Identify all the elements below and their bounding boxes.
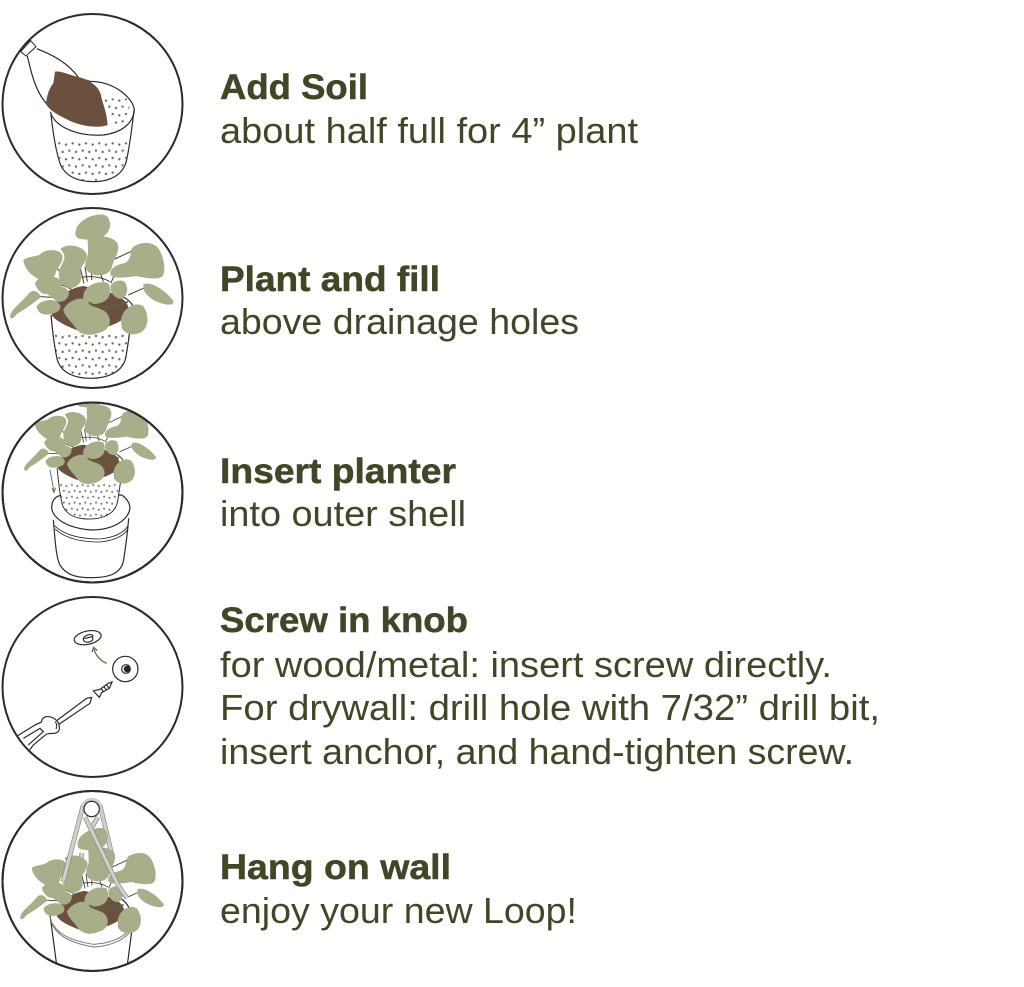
- icon: potted plant illustration: [2, 208, 182, 388]
- icon: outer pot: [50, 898, 132, 965]
- step 4: screw in knob: [2, 597, 880, 777]
- heading: plant and fill: Plant and fill: [220, 260, 440, 299]
- step 5: hang on wall: [2, 791, 577, 971]
- icon: soil scoop bag: [21, 41, 78, 107]
- icon: hanging planter illustration: [2, 791, 182, 971]
- icon: screwdriver: [13, 697, 92, 753]
- arrow: knob to plate: [92, 647, 107, 663]
- text: screw in knob detail: insert anchor, and hand-tighten screw.: [220, 731, 854, 772]
- icon: wall anchor plate: [74, 630, 102, 646]
- heading: add soil: Add Soil: [220, 68, 368, 107]
- text: plant and fill detail: above drainage holes: [220, 301, 579, 342]
- icon: screw in knob illustration: [2, 597, 182, 777]
- step 2: plant and fill: [2, 208, 579, 388]
- heading: insert planter: Insert planter: [220, 452, 456, 491]
- arrow: insert down: [50, 470, 56, 492]
- icon: insert planter illustration: [2, 388, 182, 582]
- icon: knob: [113, 656, 138, 682]
- icon: rear straps: [79, 804, 114, 858]
- text: screw in knob detail: for wood/metal: insert screw directly.: [220, 644, 832, 685]
- heading: hang on wall: Hang on wall: [220, 848, 451, 887]
- soil: [46, 72, 108, 127]
- icon: perforated pot: [51, 77, 134, 182]
- icon: screw: [93, 682, 112, 697]
- icon: outer shell: [52, 495, 130, 578]
- icon: front straps and hook: [63, 800, 127, 898]
- text: hang on wall detail: enjoy your new Loop!: [220, 890, 577, 931]
- text: add soil detail: about half full for 4” plant: [220, 110, 638, 151]
- step 1: add soil: [2, 14, 638, 194]
- text: insert planter detail: into outer shell: [220, 493, 466, 534]
- text: screw in knob detail: For drywall: drill hole with 7/32” drill bit,: [220, 687, 880, 728]
- step 3: insert planter: [2, 388, 466, 582]
- text: screw in knob detail: [220, 644, 880, 772]
- icon: add soil illustration: [2, 14, 182, 194]
- heading: screw in knob: Screw in knob: [220, 601, 468, 640]
